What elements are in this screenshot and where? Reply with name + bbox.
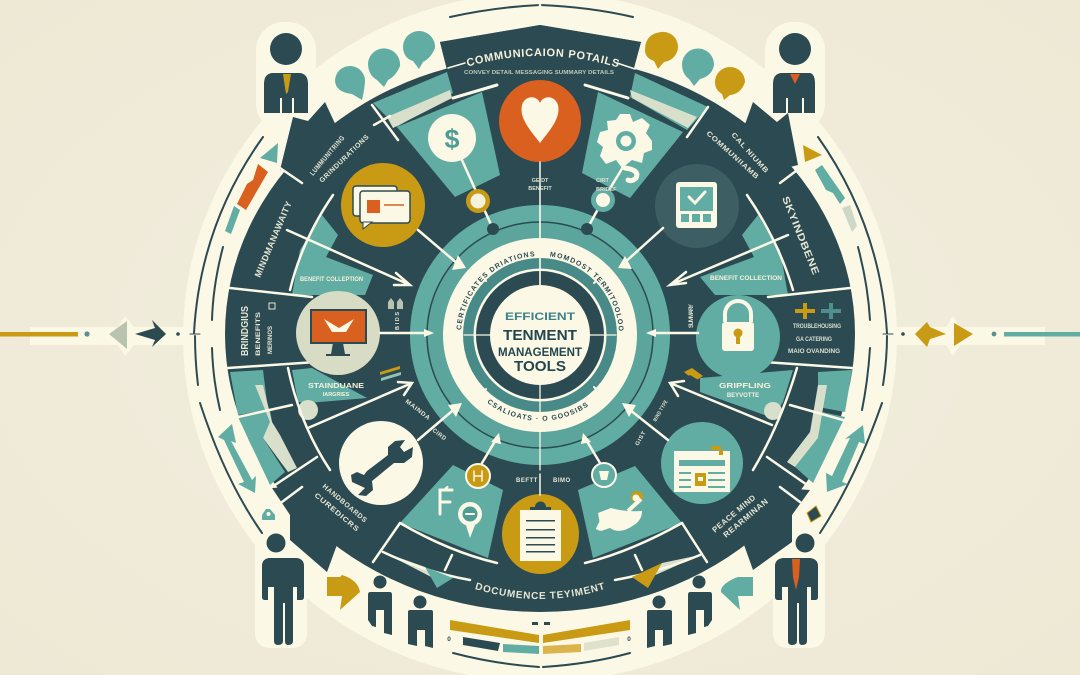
outer thin arcs <box>194 5 887 667</box>
side labels right: MAIO OVANDING <box>788 348 840 355</box>
ring labels: CERTIFICATES DRIATIONS <box>456 252 534 330</box>
panel: communication portals header: COMMUNICAION POTAILS <box>466 48 619 67</box>
icon: orange heart: BENEFIT <box>528 186 552 192</box>
panel label: benefit collection right: BENEFIT COLLECTION <box>710 275 782 282</box>
rotated labels upper right: SKYINDBENE <box>779 195 821 277</box>
arrows pointing to centre <box>287 228 788 463</box>
label: document title: DOCUMENCE TEYIMENT <box>475 582 604 600</box>
small gold bars right <box>683 368 703 385</box>
rotated labels upper left <box>253 134 371 279</box>
rotated labels lower left: MAINDA <box>404 399 431 422</box>
person top left <box>264 33 308 113</box>
side labels left: BENEFITS <box>256 312 262 356</box>
panel label: benefit collection left: BENEFIT COLLEPTION <box>300 276 363 283</box>
dark main disc <box>225 56 855 612</box>
icon: gear: CIRT <box>596 178 609 184</box>
person bottom left <box>262 534 304 645</box>
title: MANAGEMENT <box>498 347 582 359</box>
panel label: standalone left: STAINDUANE <box>308 381 364 390</box>
small people group left <box>368 576 433 648</box>
title: TOOLS <box>514 358 566 375</box>
arrowheads <box>424 255 656 444</box>
rotated labels lower left: HANDBOARDS <box>321 483 368 525</box>
triangles <box>425 563 662 588</box>
rotated labels lower right: PEACE MIND <box>711 493 758 535</box>
icon: gear: BRIDEF <box>596 187 617 193</box>
panel label: compelling right: GRIPFLING <box>719 381 771 390</box>
rotated labels lower left <box>313 399 447 534</box>
rotated labels upper right: CAL NIUMB <box>730 132 770 175</box>
panel label: compelling right <box>719 381 771 399</box>
rotated labels lower right: GIST <box>635 430 648 447</box>
rotated labels lower left: CIRD <box>431 428 447 443</box>
panel label: standalone left <box>308 381 364 398</box>
rotated labels upper left: GRINDURATIONS <box>319 134 371 184</box>
rotated labels upper right <box>705 130 821 277</box>
left axis marker <box>0 320 200 349</box>
rotated labels upper left: LUMMUNITRING <box>309 134 347 177</box>
small people group right <box>647 576 712 648</box>
icon: orange heart: GEIDT <box>532 178 549 184</box>
side teal panels <box>230 215 852 558</box>
icon: dollar: $ <box>444 124 460 154</box>
side labels left <box>240 298 403 356</box>
side labels right: GA CATERING <box>796 336 832 343</box>
side icons <box>218 143 865 522</box>
panel label: compelling right: BEYVOTTE <box>727 393 759 399</box>
rotated labels lower right: BEFTT <box>516 478 538 484</box>
ring labels: MOMDOST TERMITOOLOOS <box>550 252 624 331</box>
rotated labels lower right: MIND TYPE <box>653 399 670 423</box>
ring labels: CSALIOATS · O GOOSIBS <box>488 400 588 421</box>
icon: chat cards <box>341 163 425 247</box>
bottom bars: 0 <box>447 636 451 643</box>
panel: communication portals header: CONVEY DETAIL MESSAGING SUMMARY DETAILS <box>464 70 614 76</box>
rotated labels lower right <box>516 399 770 540</box>
rotated labels lower right: REARMINAN <box>722 497 770 540</box>
panel label: standalone left: IARGRIES <box>323 392 350 398</box>
bottom bars: 0 <box>627 636 631 643</box>
rotated labels lower left: CUREDICRS <box>313 492 360 534</box>
icon: orange heart <box>499 80 581 300</box>
central rings <box>410 205 670 470</box>
title: TENMENT <box>503 328 577 344</box>
bottom bars <box>447 620 631 654</box>
speech bubbles right <box>645 32 745 100</box>
title: EFFICIENT <box>505 311 575 323</box>
panel: communication portals header <box>440 25 641 100</box>
person top right <box>773 33 815 113</box>
icon: gear <box>581 114 652 235</box>
side labels left: BRINDGIUS <box>240 306 251 356</box>
side labels left: BIDS <box>395 312 401 330</box>
side labels left: MERINOS <box>268 326 274 354</box>
icon: dollar <box>428 114 499 235</box>
rotated labels lower right: BIMO <box>553 478 571 484</box>
icon: tablet check <box>655 164 739 248</box>
side labels right <box>689 303 841 355</box>
person bottom right <box>775 534 818 645</box>
title <box>498 311 582 375</box>
icon: monitor <box>296 291 380 375</box>
cream dividers <box>228 5 852 580</box>
pale stripes <box>255 385 827 582</box>
speech bubbles left <box>335 31 435 100</box>
icon: padlock <box>696 295 780 379</box>
arrows bottom <box>327 575 753 610</box>
ring labels <box>456 252 624 421</box>
rotated labels upper left: MINDMANAWAITY <box>253 199 294 279</box>
icon: F and location pin <box>440 435 498 538</box>
icon: wrench <box>339 421 423 505</box>
icon: clipboard <box>502 474 579 574</box>
icon: hand <box>592 463 643 531</box>
rotated labels upper right: COMMUNIIAMB <box>705 130 760 181</box>
corner flags <box>272 25 810 572</box>
side labels right: SUMMARY <box>689 304 695 328</box>
right axis marker <box>883 322 1080 347</box>
small gold bars left <box>380 366 401 381</box>
top teal panels <box>373 72 708 198</box>
side labels right: TROUBLEHOUSING <box>793 323 841 330</box>
icon: document card <box>661 422 743 504</box>
